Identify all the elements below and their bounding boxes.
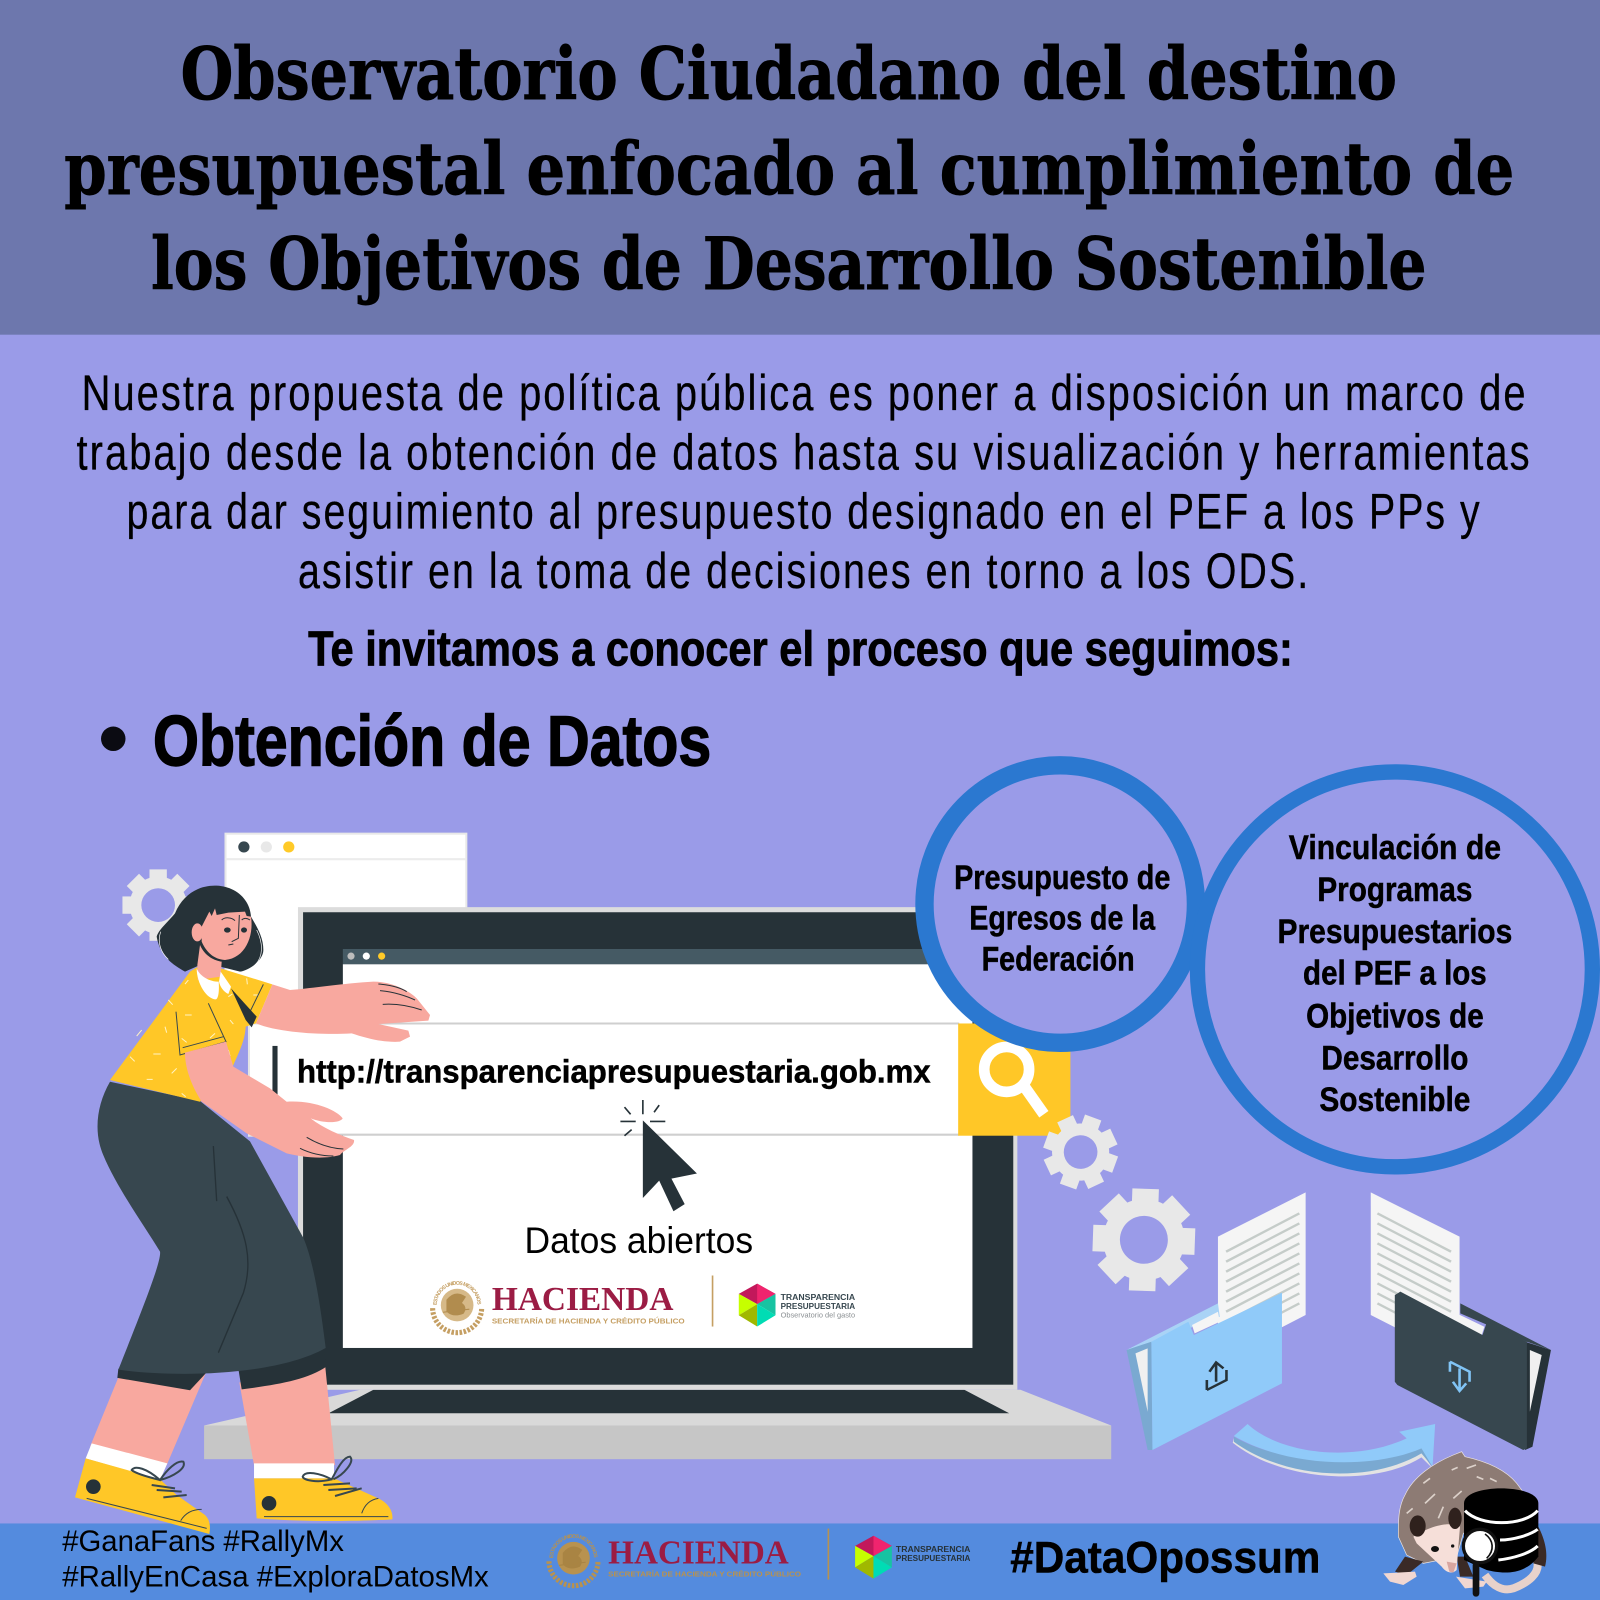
URL text: http://transparenciapresupuestaria.gob.mx [297,1053,931,1090]
background browser window [226,834,466,1136]
header band with title: Observatorio Ciudadano del destino [181,32,1397,117]
front legs [1383,1557,1487,1588]
collar [197,968,231,999]
screen logo: Hacienda: HACIENDA [492,1281,674,1318]
invitation heading: Te invitamos a conocer el proceso que seguimos: [308,622,1293,676]
ring callout: Presupuesto de Egresos de la Federación: Egresos de la [969,900,1156,938]
screen logo: Hacienda: ESTADOS UNIDOS MEXICANOS [433,1281,482,1305]
laptop screen frame [298,907,1017,1390]
tail [1485,1560,1538,1589]
ring callout: Vinculación de Programas: Programas [1317,871,1472,909]
footer logo: Transparencia Presupuestaria [855,1536,971,1579]
shorts [117,1348,327,1390]
sleeve folds [176,984,263,1055]
icon: mouse cursor [620,1100,697,1211]
legs [90,1364,335,1465]
socks [86,1443,334,1480]
document left [1218,1192,1306,1360]
search button [958,1023,1070,1136]
screen page [343,949,972,1348]
opossum head [1410,1508,1462,1573]
header band with title [0,0,1600,335]
ring callout: Vinculación de Programas: Vinculación de [1289,829,1501,867]
section heading: Obtención de Datos: Obtención de Datos [153,701,711,781]
folder right [1395,1292,1551,1450]
ring callout: Vinculación de Programas [1197,772,1592,1167]
screen logo: Transparencia Presupuestaria: Observatorio del gasto [781,1310,855,1319]
ring callout: Vinculación de Programas: Presupuestarios [1278,913,1512,951]
ring callout: Vinculación de Programas: del PEF a los [1303,955,1487,993]
icon: gear near search [1034,1105,1128,1199]
illustration: folders and documents [1127,1192,1551,1476]
arrow between folders [1233,1424,1435,1476]
laptop base [204,1390,1111,1459]
arm reaching up [256,982,430,1042]
ear [192,923,203,941]
illustration: woman lower body [90,1082,335,1465]
footer hashtags: #RallyEnCasa #ExploraDatosMx [62,1561,489,1594]
footer band [0,1524,1600,1600]
footer hashtags: #GanaFans #RallyMx [62,1525,344,1558]
shirt flecks [130,978,259,1097]
icon: large gear [1091,1187,1197,1293]
intro paragraph: asistir en la toma de decisiones en torno a los ODS. [298,543,1310,599]
lower hand lines [300,1137,343,1156]
ring callout: Vinculación de Programas: Sostenible [1319,1081,1470,1119]
label: Datos abiertos: Datos abiertos [524,1220,753,1261]
hair highlights [159,930,261,965]
facial features [222,915,250,945]
arm reaching down [185,1042,354,1158]
face [202,908,252,960]
footer logo: Transparencia Presupuestaria: PRESUPUESTARIA [896,1553,971,1563]
search bar [267,1023,1070,1136]
screen logo: Transparencia Presupuestaria [739,1284,856,1327]
footer logo: Hacienda: SECRETARÍA DE HACIENDA Y CRÉDITO PÚBLICO [608,1570,801,1579]
screen logo: Hacienda [430,1276,714,1336]
footer hashtags [62,1525,489,1594]
screen logo: Transparencia Presupuestaria: PRESUPUESTARIA [781,1301,856,1311]
fur strokes [1407,1465,1497,1518]
right shoe [254,1457,392,1521]
ring callout: Presupuesto de Egresos de la Federación: Presupuesto de [954,859,1170,897]
left shoe [75,1458,210,1534]
hind leg [1533,1527,1546,1567]
footer logo: Hacienda: ESTADOS UNIDOS MEXICANOS [549,1534,598,1558]
shirt [110,967,272,1102]
screen logo: Hacienda: SECRETARÍA DE HACIENDA Y CRÉDITO PÚBLICO [492,1316,685,1325]
footer logo: Hacienda: HACIENDA [608,1534,789,1571]
ring callout: Vinculación de Programas: Objetivos de [1306,998,1484,1036]
skirt [98,1082,326,1374]
footer hashtag: DataOpossum: #DataOpossum [1010,1531,1320,1582]
intro paragraph [77,365,1532,599]
opossum mascot with database and magnifier [1383,1452,1546,1593]
tie [231,988,257,1027]
illustration: woman upper body [110,886,430,1158]
illustration: woman shoes [75,1443,392,1534]
magnifier [1463,1529,1497,1593]
ring callout: Vinculación de Programas: Desarrollo [1321,1039,1468,1077]
laptop [204,907,1111,1459]
screen logo: Transparencia Presupuestaria: TRANSPARENCIA [781,1292,856,1302]
database icon [1464,1488,1538,1573]
icon: gear left [122,869,194,941]
neck [197,945,222,980]
footer logo: Transparencia Presupuestaria: TRANSPARENCIA [896,1544,971,1554]
ring callout: Presupuesto de Egresos de la Federación [924,765,1196,1043]
head [157,886,263,999]
upper hand lines [378,984,422,1010]
opossum body [1398,1452,1527,1563]
footer logo: Hacienda [546,1528,830,1588]
folder left [1127,1293,1282,1450]
document right [1371,1192,1460,1360]
hair [157,886,263,972]
ring callout: Presupuesto de Egresos de la Federación: Federación [982,940,1135,978]
